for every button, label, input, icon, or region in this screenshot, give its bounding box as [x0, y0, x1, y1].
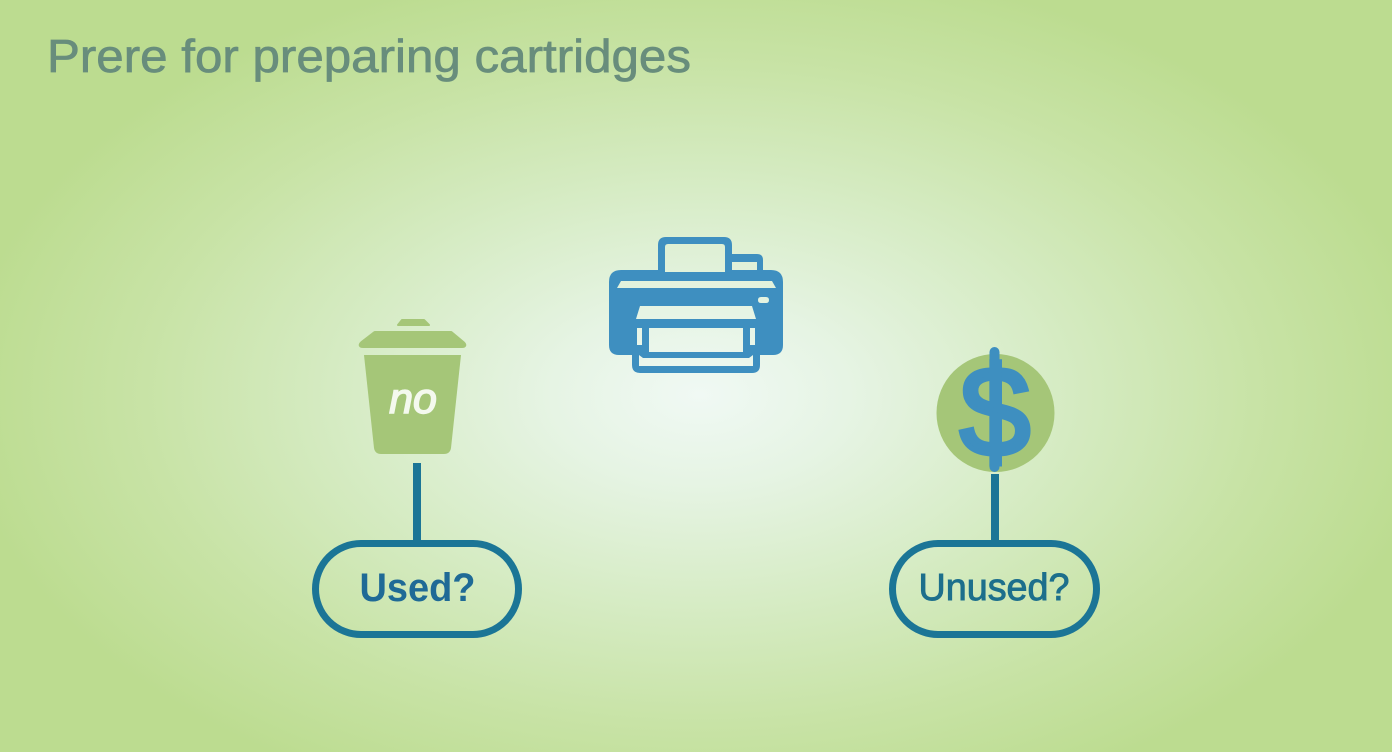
- dollar bar: [990, 347, 1000, 472]
- icon: printer: [609, 237, 783, 373]
- icon: green bin with no label: [361, 320, 464, 454]
- bin body: [364, 355, 461, 454]
- icon: dollar coin: [936, 341, 1054, 482]
- decision pill: Unused: [892, 544, 1096, 634]
- decision pill: Used: [316, 544, 518, 634]
- bin label: no: [389, 375, 437, 423]
- coin: [936, 354, 1054, 472]
- connector: coin to Unused: [991, 474, 999, 542]
- title: Prere for preparing cartridges: [47, 30, 691, 82]
- decision pill: Used: Used?: [360, 566, 476, 610]
- decision pill: Unused: Unused?: [918, 567, 1070, 609]
- connector: bin to Used: [413, 463, 421, 542]
- dollar sign: $: [960, 341, 1030, 482]
- bin lid knob: [398, 320, 429, 325]
- bin lid: [361, 333, 464, 346]
